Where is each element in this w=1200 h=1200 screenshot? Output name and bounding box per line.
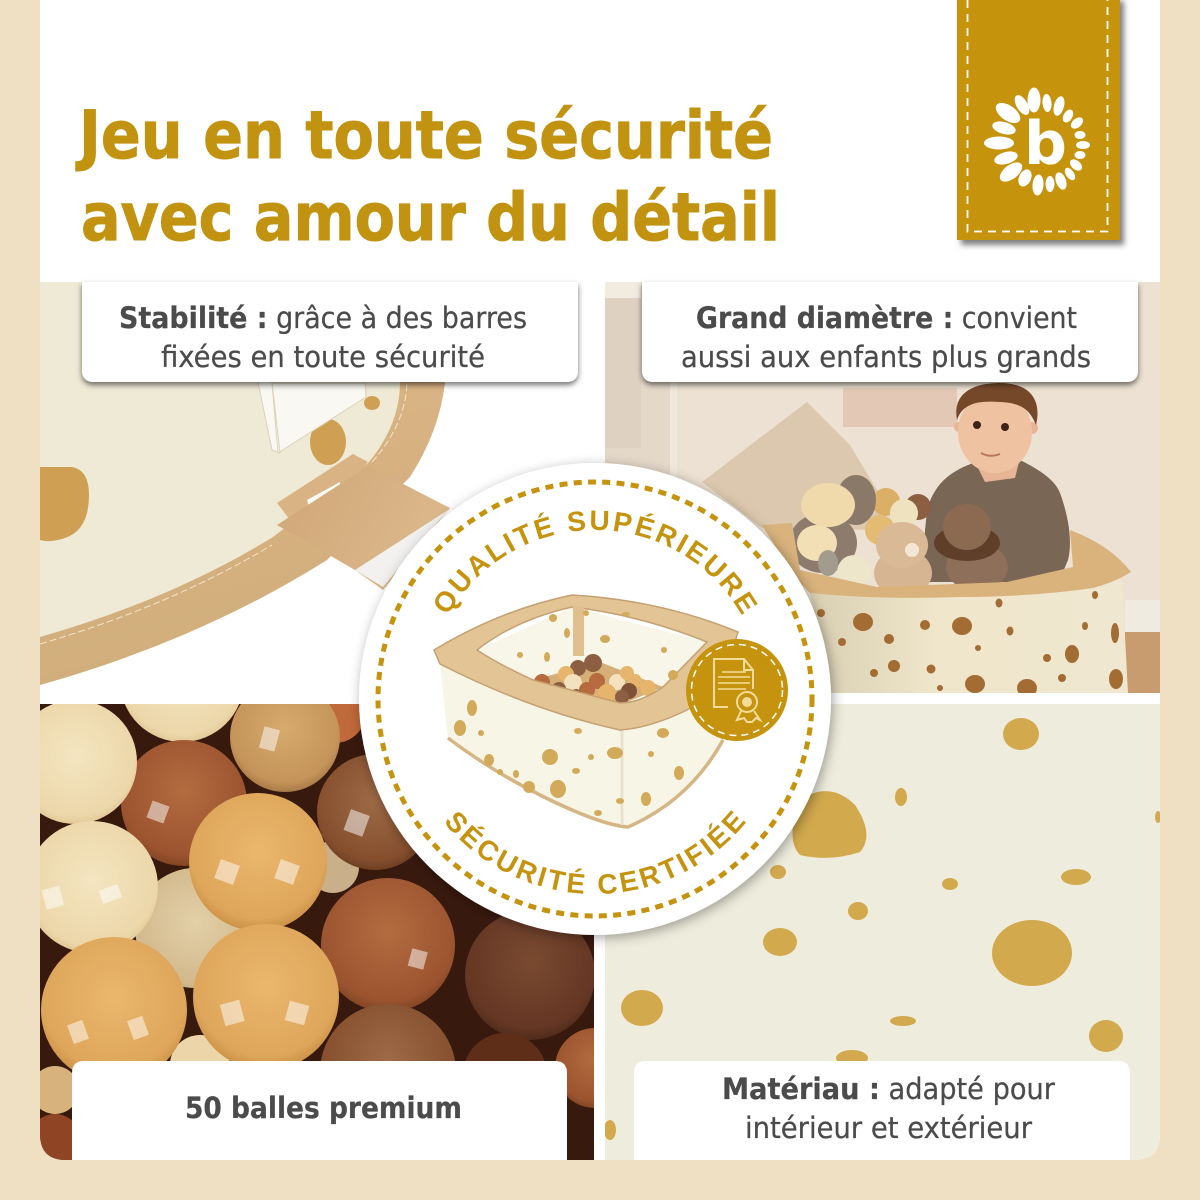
wall hanging bbox=[843, 388, 957, 427]
balls bbox=[534, 654, 656, 704]
tab bbox=[277, 454, 450, 590]
logo sunflower: b bbox=[1024, 109, 1067, 179]
spots bbox=[454, 610, 684, 816]
caption: grand diamètre: aussi aux enfants plus grands bbox=[681, 340, 1091, 374]
badge top text: QUALITÉ SUPÉRIEURE bbox=[435, 510, 758, 615]
caption: 50 balles bbox=[72, 1061, 567, 1160]
photo: premium balls bbox=[40, 704, 594, 1160]
velcro strap bbox=[258, 382, 366, 453]
caption: matériau: intérieur et extérieur bbox=[745, 1111, 1032, 1145]
rim bbox=[434, 595, 738, 730]
title: avec amour du détail bbox=[81, 179, 780, 256]
central quality badge bbox=[354, 458, 840, 946]
child bbox=[920, 383, 1070, 582]
photo: child in playpen bbox=[605, 282, 1160, 697]
caption: stabilité bbox=[82, 282, 578, 382]
caption: matériau: Matériau : adapté pour bbox=[722, 1072, 1055, 1106]
certificate seal bbox=[686, 639, 788, 741]
badge bottom text: SÉCURITÉ CERTIFIÉE bbox=[446, 810, 746, 894]
playpen product bbox=[434, 595, 738, 827]
hoop bbox=[40, 382, 445, 685]
photo: fabric stability detail bbox=[40, 282, 450, 685]
spots bbox=[40, 467, 89, 541]
brand label bbox=[957, 0, 1120, 240]
title bbox=[75, 97, 780, 256]
caption: stabilité: Stabilité : grâce à des barres bbox=[119, 301, 527, 335]
caption: 50 balles: 50 balles premium bbox=[185, 1091, 462, 1125]
highlights bbox=[42, 726, 428, 1044]
playpen bbox=[810, 593, 1128, 693]
caption: matériau bbox=[634, 1061, 1130, 1160]
cushion bbox=[702, 402, 880, 530]
plush toys bbox=[789, 475, 1008, 597]
icon: certificate bbox=[714, 659, 760, 722]
title: Jeu en toute sécurité bbox=[75, 97, 773, 174]
logo sunflower bbox=[984, 88, 1090, 196]
caption: grand diamètre: Grand diamètre : convient bbox=[696, 301, 1077, 335]
caption: grand diamètre bbox=[642, 282, 1138, 382]
fabric bbox=[40, 282, 402, 639]
caption: stabilité: fixées en toute sécurité bbox=[161, 340, 485, 374]
photo: fabric material bbox=[604, 704, 1161, 1160]
